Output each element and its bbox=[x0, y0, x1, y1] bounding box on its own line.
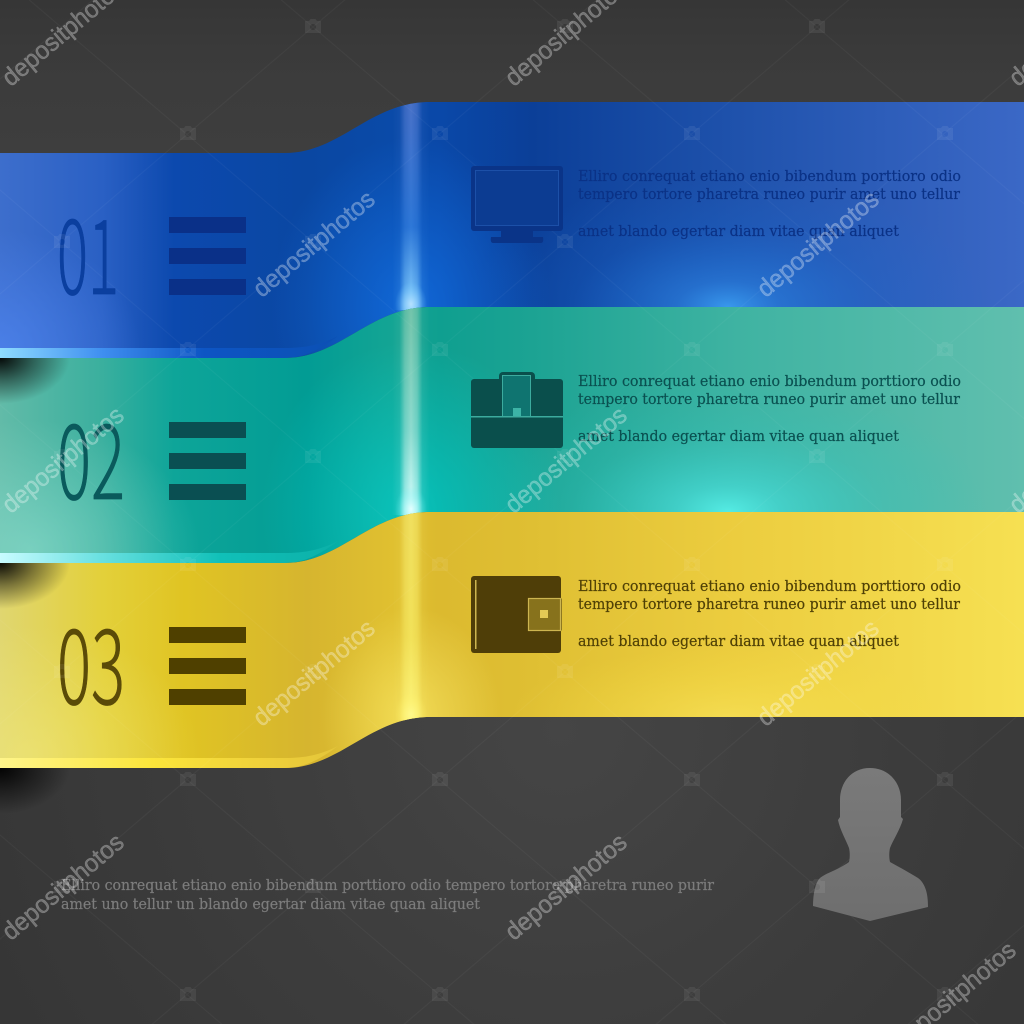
text block 1: amet blando egertar diam vitae quan aliquet bbox=[578, 222, 899, 240]
panel: ribbon 01 blue bbox=[0, 102, 1024, 358]
icon: wallet bbox=[471, 576, 562, 653]
watermark text: depositphotos bbox=[500, 401, 632, 519]
text block 3: amet blando egertar diam vitae quan aliquet bbox=[578, 632, 899, 650]
number 03: 03 bbox=[57, 583, 125, 734]
number 01: 01 bbox=[57, 173, 119, 324]
footer text block: Elliro conrequat etiano enio bibendum porttioro odio tempero tortore pharetra runeo purir bbox=[61, 876, 715, 894]
watermark text: depositphotos bbox=[0, 828, 129, 946]
top dark band bbox=[0, 0, 1024, 160]
number 02: 02 bbox=[57, 378, 125, 529]
footer text block: amet uno tellur un blando egertar diam vitae quan aliquet bbox=[61, 895, 480, 913]
footer text block bbox=[61, 876, 715, 913]
icon: monitor bbox=[471, 166, 563, 243]
icon: briefcase bbox=[471, 372, 563, 448]
text block 1: Elliro conrequat etiano enio bibendum porttioro odio bbox=[578, 167, 961, 185]
watermark text: depositphotos bbox=[752, 614, 884, 732]
text block 3 bbox=[578, 577, 961, 650]
watermark text: depositphotos bbox=[248, 185, 380, 303]
menu icon 01 bbox=[169, 217, 246, 295]
panel: ribbon 02 teal bbox=[0, 307, 1024, 563]
text block 1: tempero tortore pharetra runeo purir amet uno tellur bbox=[578, 185, 961, 203]
menu icon 02 bbox=[169, 422, 246, 500]
text block 3: tempero tortore pharetra runeo purir amet uno tellur bbox=[578, 595, 961, 613]
panel: ribbon 03 yellow bbox=[0, 512, 1024, 768]
text block 2 bbox=[578, 372, 961, 445]
watermark text: depositphotos bbox=[500, 828, 632, 946]
text block 2: Elliro conrequat etiano enio bibendum porttioro odio bbox=[578, 372, 961, 390]
shadow under ribbon 03 bbox=[0, 722, 70, 814]
watermark text: depositphotos bbox=[752, 185, 884, 303]
watermark text: depositphotos bbox=[248, 614, 380, 732]
watermark text: depositphotos bbox=[0, 401, 129, 519]
text block 3: Elliro conrequat etiano enio bibendum porttioro odio bbox=[578, 577, 961, 595]
menu icon 03 bbox=[169, 627, 246, 705]
text block 2: tempero tortore pharetra runeo purir amet uno tellur bbox=[578, 390, 961, 408]
text block 1 bbox=[578, 167, 961, 240]
icon: person silhouette bbox=[813, 768, 928, 921]
text block 2: amet blando egertar diam vitae quan aliquet bbox=[578, 427, 899, 445]
